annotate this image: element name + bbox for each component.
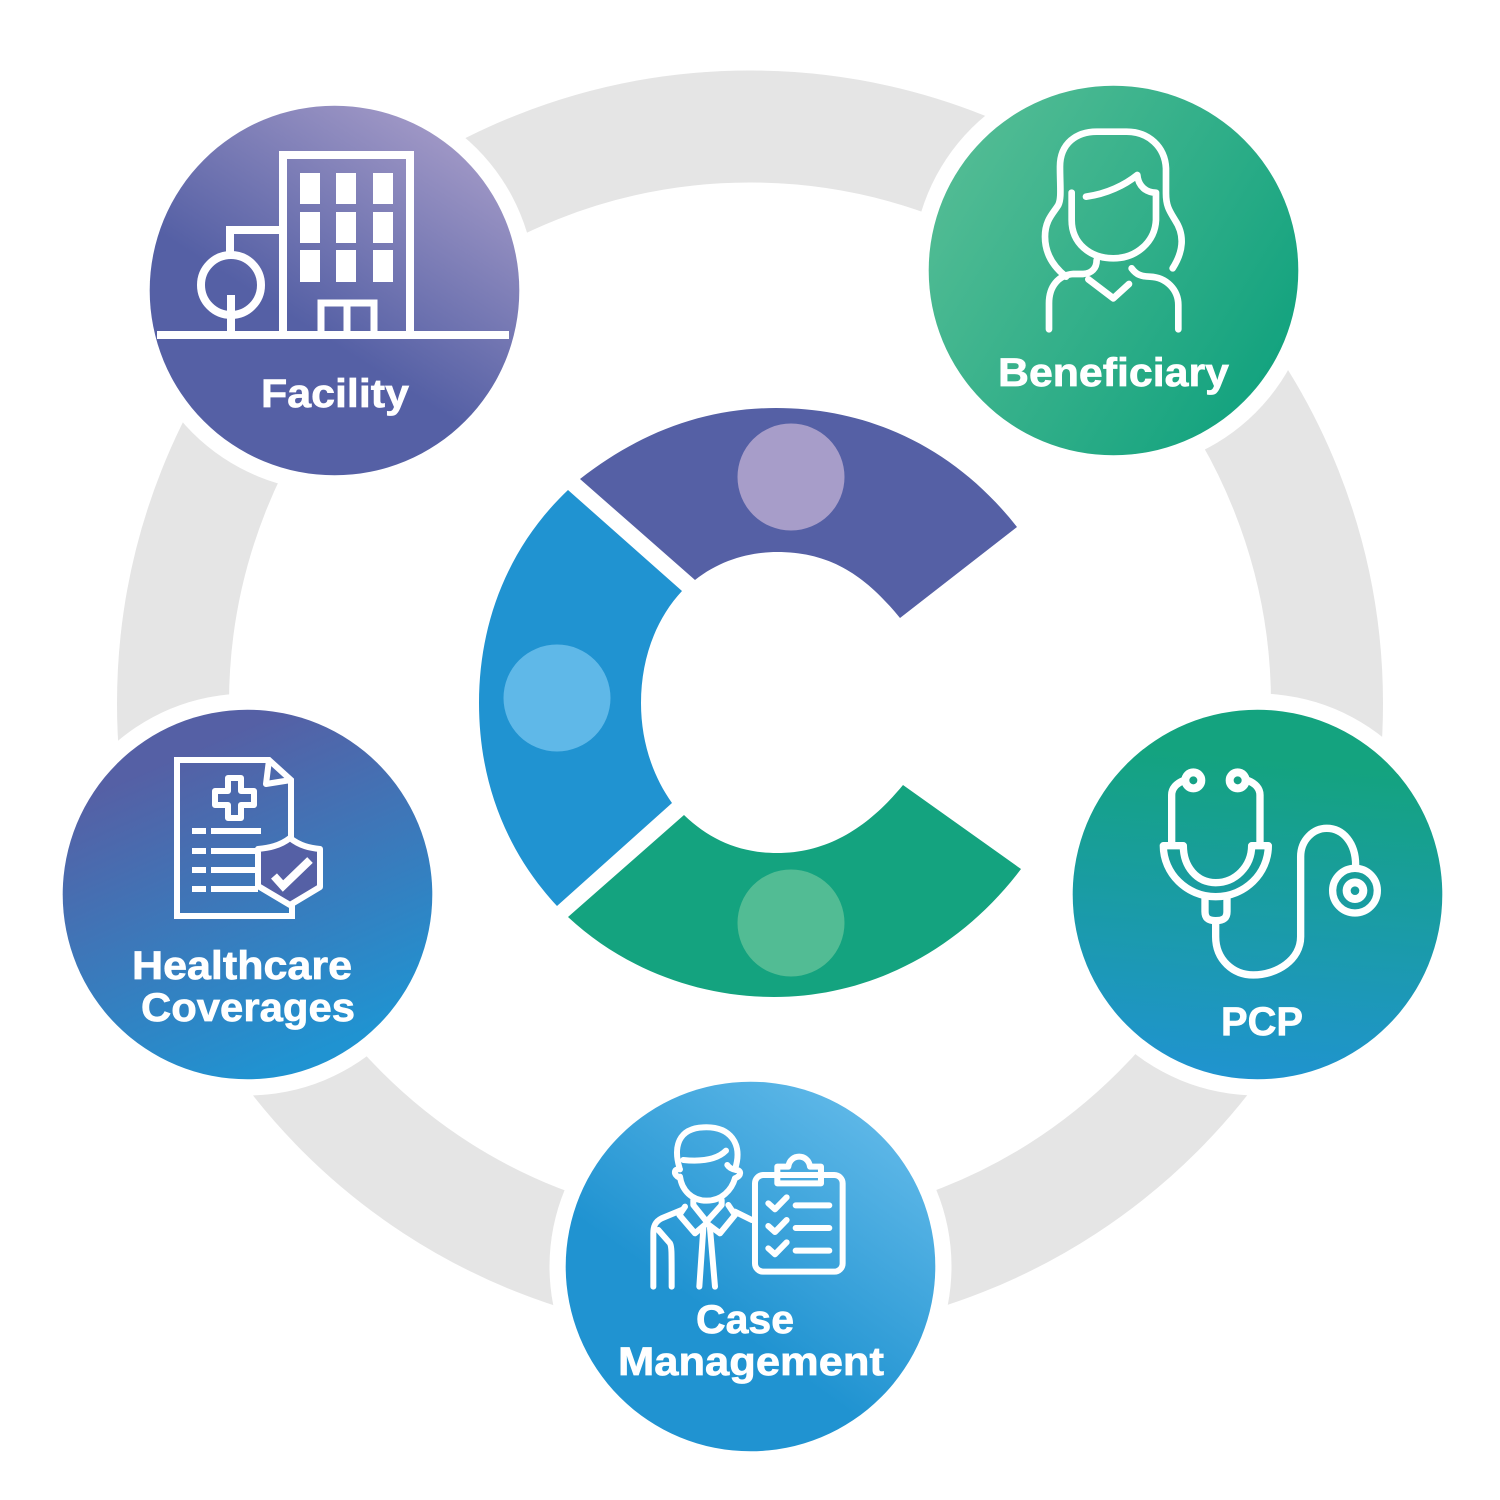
logo segment: left blue [479,490,682,906]
panel: Facility [134,90,536,492]
label: Beneficiary: Beneficiary [998,351,1230,395]
label: Healthcare Coverages: Healthcare [132,944,352,988]
central C logo [479,408,1021,997]
logo dot: bottom [738,870,844,976]
icon: medical document with shield [177,760,320,916]
panel: Beneficiary [912,70,1314,472]
label: Case Management: Case [696,1298,794,1342]
panel: PCP [1056,694,1458,1096]
label: PCP: PCP [1221,1000,1303,1044]
logo dot: top [738,424,844,530]
logo dot: left [504,644,610,752]
label: Case Management: Management [618,1340,884,1384]
label: Facility: Facility [261,372,410,416]
logo segment: top purple [580,408,1017,618]
label: Healthcare Coverages: Coverages [141,986,355,1030]
icon: woman [1045,132,1182,329]
panel: Healthcare Coverages [46,694,448,1096]
grey cycle ring [173,126,1327,1280]
label: Healthcare Coverages [132,944,355,1030]
icon: building and tree [157,155,509,335]
icon: person with clipboard [653,1127,843,1287]
panel: Case Management [550,1066,952,1468]
logo segment: bottom green [568,785,1021,997]
icon: stethoscope [1163,772,1377,975]
label: Case Management [618,1298,884,1384]
